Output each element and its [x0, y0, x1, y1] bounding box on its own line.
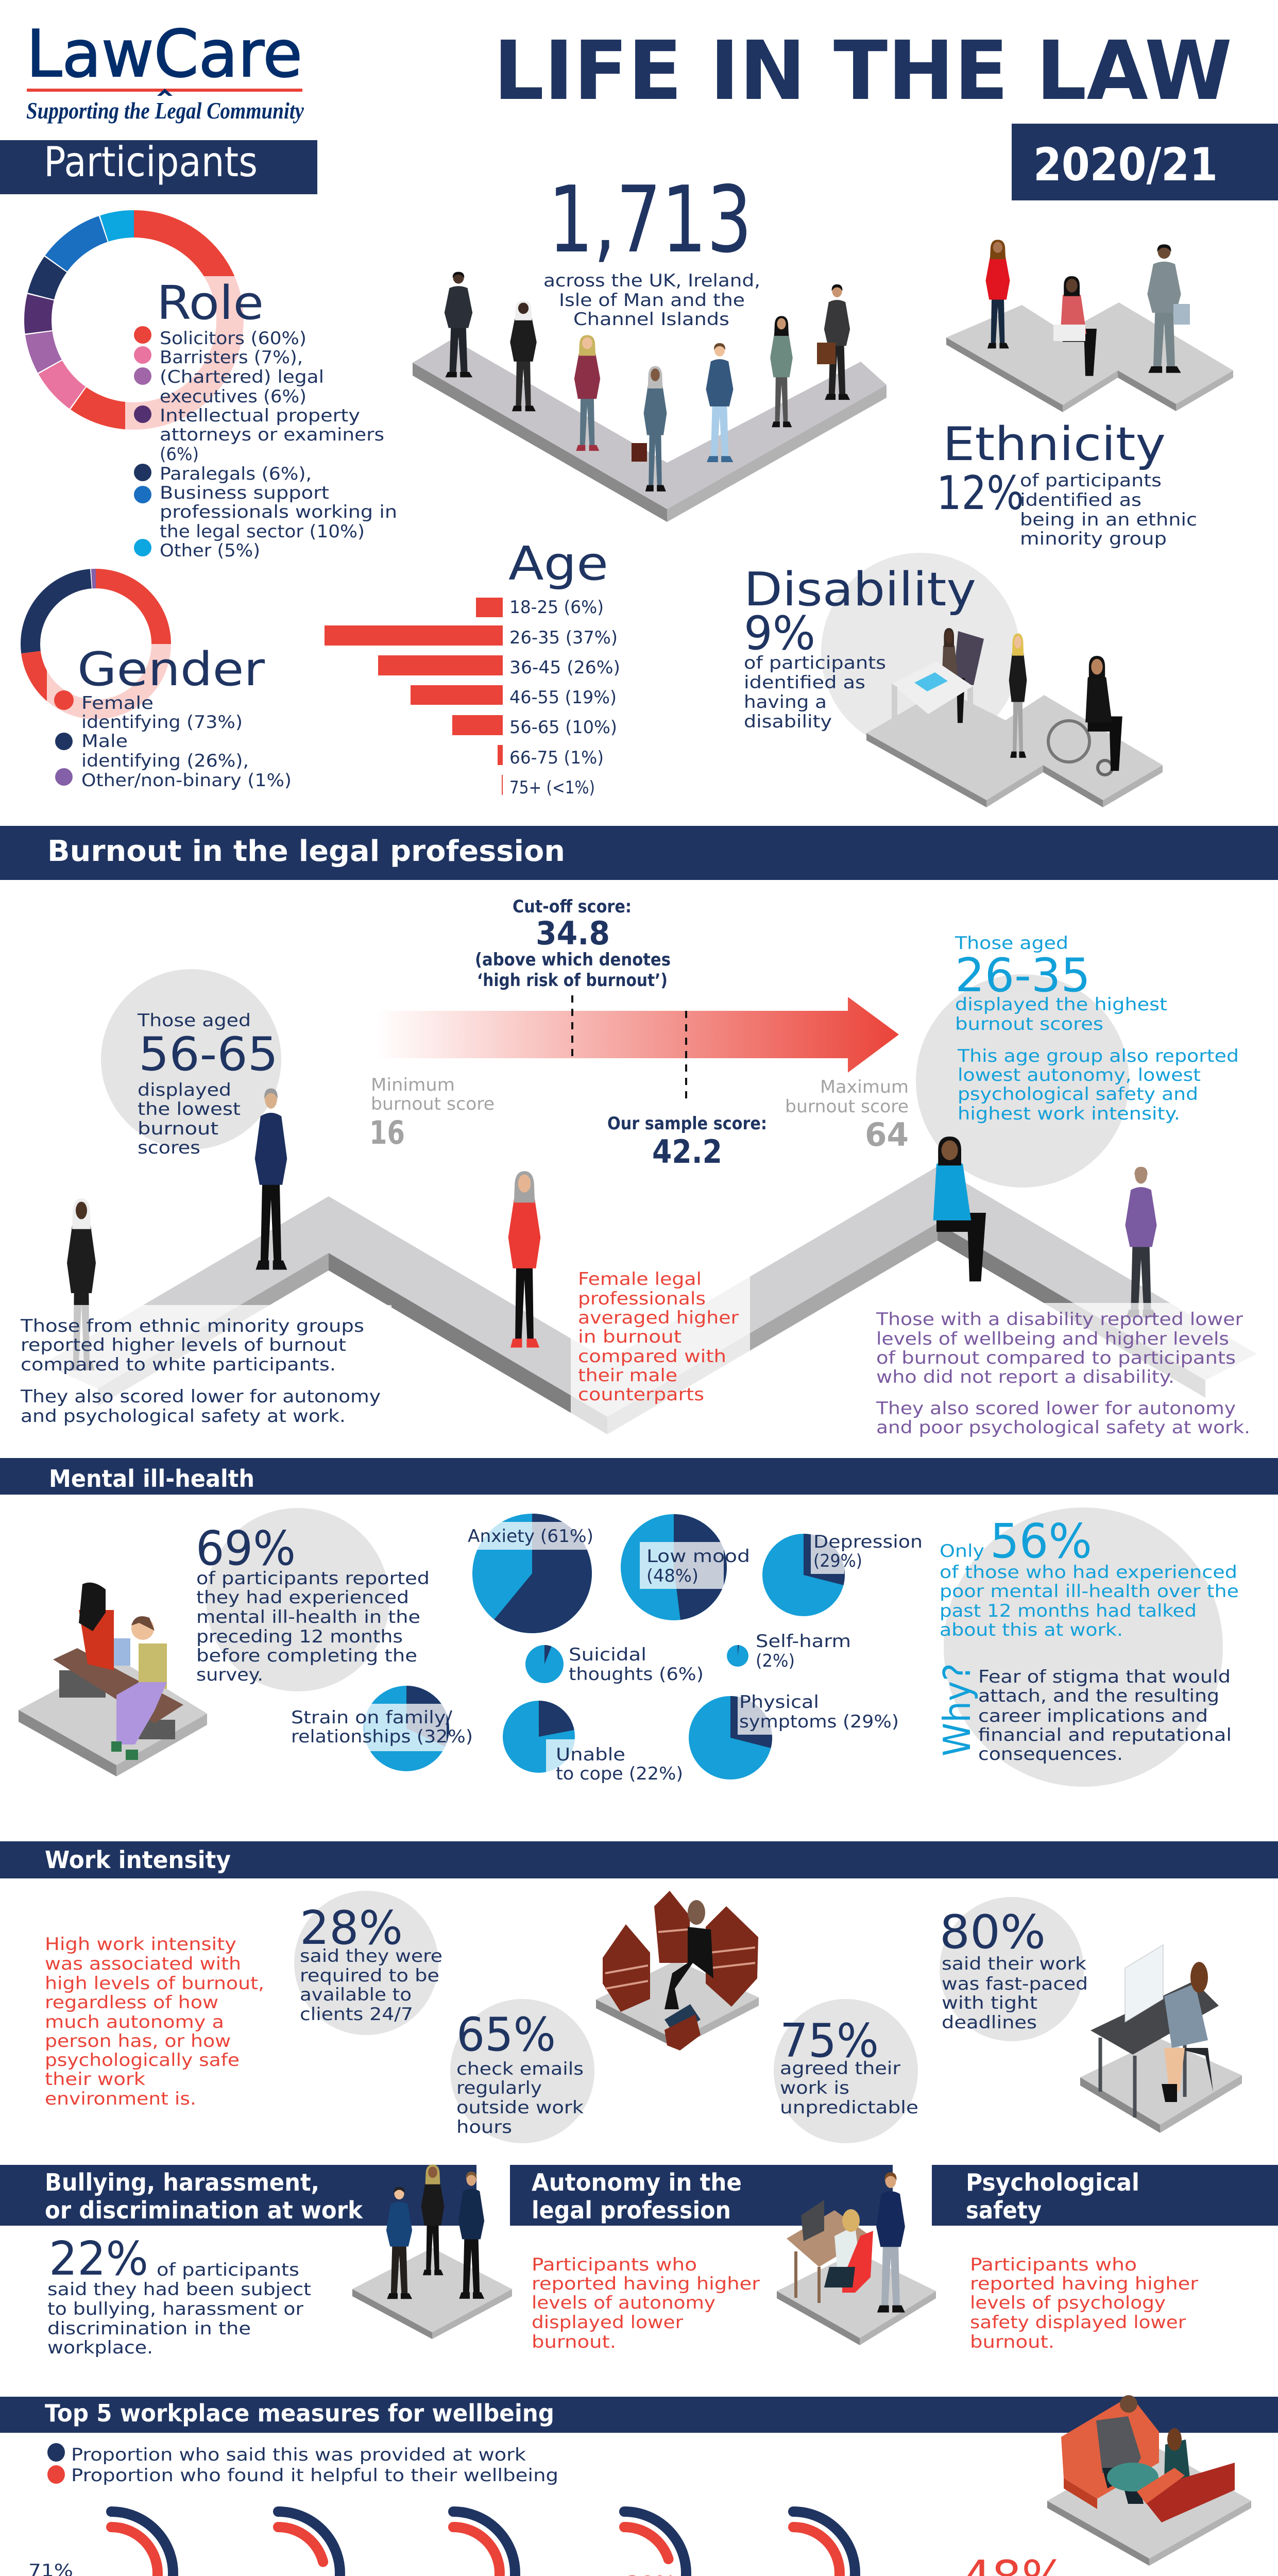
figures: disability — [892, 628, 1122, 775]
role legend: (Chartered) legal — [160, 367, 324, 387]
autonomy text: levels of autonomy — [532, 2293, 715, 2313]
stat: 65 percent: 65% — [456, 2008, 556, 2062]
disability text: having a — [744, 692, 827, 713]
female legal professionals text: professionals — [578, 1289, 706, 1309]
gender legend: Other/non-binary (1%) — [81, 770, 292, 791]
stat: 28 percent: 28% — [300, 1901, 403, 1955]
disability text: disability — [744, 711, 832, 732]
gender legend: Male — [81, 731, 128, 752]
locations text — [543, 270, 760, 330]
grey circle: lowest burnout — [101, 969, 281, 1149]
work intensity red text: much autonomy a — [45, 2012, 224, 2032]
lowest burnout text: displayed — [138, 1080, 231, 1100]
ethnicity text — [1020, 470, 1197, 549]
panel: ethnicity — [936, 240, 1233, 549]
lowest burnout text: Those aged — [137, 1010, 251, 1031]
zigzag platform — [42, 1166, 1257, 1434]
stat: 75 percent: work is — [780, 2078, 849, 2098]
age labels — [509, 597, 620, 798]
stat: 65 percent: hours — [456, 2117, 512, 2138]
ethnicity text: identified as — [1020, 490, 1141, 511]
female legal professionals text: their male — [578, 1365, 677, 1386]
role legend: Paralegals (6%), — [160, 464, 312, 484]
minimum score: 16 — [369, 1114, 405, 1151]
section: work intensity — [0, 1841, 1278, 2143]
stat: 80 percent: deadlines — [942, 2012, 1037, 2033]
pie: depression: Depression — [813, 1532, 923, 1552]
age labels: 36-45 (26%) — [509, 657, 620, 678]
role legend: professionals working in — [160, 502, 397, 522]
role legend — [134, 326, 397, 561]
stat: 65 percent: regularly — [456, 2078, 542, 2098]
gender legend: identifying (73%) — [81, 712, 243, 733]
age labels: 18-25 (6%) — [509, 597, 604, 618]
role legend: Other (5%) — [160, 540, 260, 561]
highest burnout text: This age group also reported — [957, 1046, 1239, 1066]
ethnicity percentage: 12% — [936, 466, 1024, 520]
arc chart: wellbeing and training — [383, 2512, 515, 2576]
role legend: executives (6%) — [160, 386, 306, 407]
psychological safety text: safety displayed lower — [970, 2312, 1186, 2333]
platform: ethnicity — [946, 302, 1233, 412]
platform: disability — [866, 689, 1163, 807]
section: workplace measures — [0, 2395, 1278, 2576]
female legal professionals text: Female legal — [578, 1269, 702, 1290]
heading: psychological safety — [932, 2165, 1278, 2226]
panel: disability — [744, 553, 1163, 807]
cut-off score — [475, 896, 671, 991]
pie: physical symptoms — [689, 1692, 899, 1780]
bullying stat: 22% — [49, 2232, 148, 2286]
heading: autonomy — [510, 2165, 893, 2226]
stat: 28 percent: clients 24/7 — [300, 2004, 413, 2025]
age labels: 75+ (<1%) — [509, 777, 595, 798]
highest burnout text: highest work intensity. — [958, 1104, 1180, 1124]
heading: top 5 measures: Top 5 workplace measures for wellbeing — [45, 2399, 554, 2427]
highest burnout text: displayed the highest — [955, 994, 1167, 1015]
bullying stat — [47, 2232, 311, 2358]
locations text: Channel Islands — [573, 309, 729, 330]
heading: top 5 measures — [0, 2397, 1278, 2433]
pie: low mood — [621, 1514, 750, 1620]
pie: depression — [762, 1532, 923, 1616]
56 percent stat: Only — [940, 1541, 984, 1562]
pie: strain on family: Strain on family/ — [291, 1707, 453, 1728]
heading: participants: Participants — [44, 138, 258, 186]
pie: self-harm: (2%) — [756, 1651, 795, 1671]
sample score: Our sample score: — [607, 1113, 767, 1134]
heading: work intensity — [0, 1841, 1278, 1878]
total number: 1,713 — [548, 166, 752, 273]
cut-off score: Cut-off score: — [513, 896, 632, 917]
stat: 65 percent — [450, 1999, 594, 2143]
panel: bullying — [0, 2164, 512, 2358]
pie: unable to cope — [503, 1701, 683, 1784]
heading: bullying — [0, 2165, 476, 2226]
female legal professionals text — [578, 1269, 739, 1405]
56 percent stat: about this at work. — [940, 1620, 1123, 1640]
pie: suicidal thoughts: Suicidal — [569, 1645, 646, 1665]
work intensity red text: environment is. — [45, 2089, 196, 2109]
illustration: three colleagues — [352, 2164, 512, 2339]
age labels: 66-75 (1%) — [509, 748, 604, 768]
age labels: 46-55 (19%) — [509, 687, 617, 708]
ethnicity text: of participants — [1020, 470, 1162, 491]
pie: physical symptoms: Physical — [739, 1692, 819, 1713]
female legal professionals text: counterparts — [578, 1384, 704, 1405]
69 percent stat: of participants reported — [196, 1568, 430, 1589]
female legal professionals text: in burnout — [578, 1327, 681, 1347]
ethnicity text: minority group — [1020, 529, 1167, 549]
why text: financial and reputational — [978, 1725, 1232, 1745]
69 percent stat: mental ill-health in the — [196, 1607, 420, 1628]
role heading: Role — [157, 276, 264, 330]
stat: 80 percent: with tight — [942, 1993, 1037, 2013]
highest burnout text: 26-35 — [955, 948, 1090, 1003]
why text: career implications and — [978, 1706, 1208, 1726]
disability percentage: 9% — [744, 606, 815, 660]
heading: burnout — [0, 826, 1278, 880]
highest burnout text: burnout scores — [955, 1014, 1103, 1035]
role legend: Intellectual property — [160, 405, 360, 426]
disability burnout text: who did not report a disability. — [876, 1367, 1174, 1387]
locations text: across the UK, Ireland, — [543, 270, 760, 291]
highest burnout text — [955, 933, 1239, 1124]
work intensity red text: their work — [45, 2069, 145, 2090]
stat: 65 percent: outside work — [456, 2097, 584, 2118]
stat: 80 percent — [940, 1897, 1088, 2041]
heading: burnout: Burnout in the legal profession — [47, 835, 565, 868]
minimum score: burnout score — [371, 1094, 495, 1114]
role legend: Solicitors (60%) — [160, 328, 306, 349]
stat: 75 percent: 75% — [780, 2014, 879, 2068]
autonomy text: displayed lower — [532, 2312, 683, 2333]
arc chart: private health insurance — [731, 2512, 855, 2576]
logo: LawCare: Supporting the Legal Community — [26, 98, 304, 124]
69 percent stat — [196, 1521, 430, 1685]
illustration: two people on sofas — [1047, 2395, 1251, 2566]
56 percent stat — [940, 1514, 1239, 1640]
work intensity red text: high levels of burnout, — [45, 1973, 264, 1994]
autonomy text: reported having higher — [532, 2274, 760, 2294]
why text — [978, 1667, 1232, 1765]
illustration: woman at desk — [1080, 1945, 1242, 2133]
bullying stat: workplace. — [47, 2337, 153, 2358]
gender legend — [54, 690, 292, 791]
highest burnout text: Those aged — [955, 933, 1068, 954]
locations text: Isle of Man and the — [559, 290, 745, 311]
gender legend: Female — [81, 693, 154, 714]
psychological safety text: Participants who — [970, 2255, 1137, 2275]
heading: autonomy: Autonomy in the — [532, 2168, 742, 2196]
bullying stat: to bullying, harassment or — [47, 2299, 303, 2319]
arc chart: regular catch-ups — [28, 2512, 173, 2576]
lowest burnout text: burnout — [138, 1118, 218, 1139]
stat: 75 percent — [774, 1999, 918, 2143]
maximum score — [785, 1077, 909, 1154]
panel: total participants — [413, 166, 887, 522]
disability text: of participants — [744, 653, 886, 673]
69 percent stat: preceding 12 months — [196, 1626, 403, 1647]
section: mental ill-health — [0, 1458, 1278, 1787]
role legend: (6%) — [160, 444, 199, 465]
69 percent stat: 69% — [196, 1521, 296, 1576]
pie: depression: (29%) — [813, 1551, 862, 1571]
ethnic minority text: They also scored lower for autonomy — [20, 1386, 381, 1407]
gender legend: identifying (26%), — [81, 751, 249, 771]
pie: unable to cope: Unable — [556, 1744, 625, 1765]
69 percent stat: survey. — [196, 1665, 263, 1685]
56 percent stat: poor mental ill-health over the — [940, 1581, 1239, 1602]
56 percent stat: of those who had experienced — [940, 1562, 1237, 1583]
highest burnout text: lowest autonomy, lowest — [958, 1065, 1201, 1086]
ethnicity heading: Ethnicity — [943, 417, 1166, 471]
lowest burnout text: scores — [138, 1138, 200, 1158]
stat: 80 percent: said their work — [942, 1954, 1086, 1974]
why text: Fear of stigma that would — [978, 1667, 1231, 1687]
grey circle: highest burnout — [916, 974, 1129, 1188]
ethnic minority text: and psychological safety at work. — [21, 1406, 346, 1427]
arc chart: mental health policies — [210, 2512, 340, 2576]
pie: suicidal thoughts: thoughts (6%) — [569, 1664, 704, 1685]
pie: anxiety: Anxiety (61%) — [468, 1526, 593, 1547]
minimum score — [369, 1075, 495, 1151]
cut-off score: ‘high risk of burnout’) — [477, 970, 668, 991]
heading: participants — [0, 138, 317, 194]
work intensity red text: was associated with — [45, 1954, 241, 1974]
disability text: identified as — [744, 672, 865, 693]
disability heading: Disability — [744, 563, 976, 617]
pie: self-harm: Self-harm — [756, 1631, 851, 1652]
lowest burnout text — [137, 1010, 278, 1158]
gender donut chart — [30, 579, 161, 709]
why text: attach, and the resulting — [978, 1686, 1219, 1706]
gender heading: Gender — [77, 642, 265, 697]
role donut chart — [38, 224, 230, 416]
chart legend — [47, 2443, 558, 2486]
pie: unable to cope: to cope (22%) — [556, 1764, 683, 1784]
disability burnout text: levels of wellbeing and higher levels — [876, 1329, 1229, 1349]
ethnic minority text: compared to white participants. — [21, 1354, 336, 1375]
heading: psychological safety: Psychological — [966, 2168, 1139, 2196]
stat: 65 percent: check emails — [456, 2059, 584, 2079]
bullying stat: discrimination in the — [47, 2318, 251, 2339]
autonomy text: Participants who — [532, 2255, 697, 2275]
figures: burnout — [67, 1089, 1157, 1370]
stat: 80 percent: was fast-paced — [942, 1974, 1088, 1994]
disability burnout text: of burnout compared to participants — [876, 1348, 1236, 1368]
chart legend: Proportion who found it helpful to their wellbeing — [71, 2465, 558, 2486]
arc chart: signposting — [563, 2512, 686, 2576]
psychological safety text: levels of psychology — [970, 2293, 1166, 2313]
disability burnout text — [876, 1309, 1250, 1438]
panel: psychological safety — [932, 2165, 1278, 2352]
figures: legal professionals — [445, 272, 850, 492]
female legal professionals text: compared with — [578, 1346, 726, 1367]
platform: participants — [413, 339, 887, 522]
disability text — [744, 653, 886, 732]
autonomy text: burnout. — [532, 2332, 616, 2352]
stat: 28 percent: available to — [300, 1985, 412, 2005]
heading: bullying: Bullying, harassment, — [45, 2168, 319, 2196]
why heading: Why? — [935, 1663, 979, 1756]
age labels: 56-65 (10%) — [509, 717, 617, 738]
work intensity red text: psychologically safe — [45, 2050, 240, 2071]
maximum score: 64 — [865, 1116, 909, 1154]
bullying stat: said they had been subject — [47, 2279, 311, 2300]
56 percent stat: 56% — [990, 1514, 1092, 1569]
panel: age — [325, 537, 620, 798]
cut-off score: 34.8 — [536, 914, 610, 952]
69 percent stat: they had experienced — [196, 1587, 409, 1608]
age bar chart — [325, 598, 503, 795]
female legal professionals text: averaged higher — [578, 1308, 739, 1328]
logo: LawCare: LawCare — [26, 16, 302, 92]
69 percent stat: before completing the — [196, 1646, 417, 1666]
pie: suicidal thoughts — [525, 1645, 704, 1685]
ethnic minority text — [20, 1316, 381, 1427]
highest burnout text: psychological safety and — [958, 1084, 1198, 1105]
role legend: Barristers (7%), — [160, 347, 303, 368]
title: LIFE IN THE LAW — [493, 24, 1232, 118]
stat: 80 percent: 80% — [940, 1905, 1046, 1959]
pie: low mood: Low mood — [646, 1546, 750, 1567]
section: burnout — [0, 826, 1278, 1449]
pie: low mood: (48%) — [646, 1566, 698, 1586]
work intensity red text: High work intensity — [45, 1934, 236, 1955]
role legend: the legal sector (10%) — [160, 521, 365, 542]
ethnic minority text: reported higher levels of burnout — [21, 1335, 346, 1355]
age heading: Age — [508, 537, 608, 591]
psychological safety text: reported having higher — [970, 2274, 1198, 2294]
maximum score: burnout score — [785, 1096, 909, 1117]
year badge — [1012, 124, 1278, 200]
bullying stat: of participants — [157, 2260, 299, 2280]
stat: 28 percent: said they were — [300, 1946, 442, 1967]
figures: ethnicity — [985, 240, 1190, 376]
ethnicity text: being in an ethnic — [1020, 510, 1197, 530]
heading: autonomy: legal profession — [532, 2196, 731, 2224]
autonomy text — [532, 2255, 760, 2352]
minimum score: Minimum — [371, 1075, 455, 1095]
disability burnout text: They also scored lower for autonomy — [876, 1398, 1236, 1419]
stat: 28 percent — [294, 1891, 442, 2035]
burnout arrow — [375, 995, 899, 1105]
pie: self-harm — [727, 1631, 851, 1671]
pie: anxiety — [468, 1514, 593, 1633]
chart legend: Proportion who said this was provided at work — [71, 2445, 526, 2465]
stat: 28 percent: required to be — [300, 1965, 439, 1986]
why text: consequences. — [978, 1744, 1123, 1765]
year badge: 2020/21 — [1033, 138, 1218, 191]
maximum score: Maximum — [820, 1077, 909, 1097]
role legend: attorneys or examiners — [160, 425, 384, 445]
disability burnout text: Those with a disability reported lower — [876, 1309, 1243, 1330]
lowest burnout text: the lowest — [138, 1099, 241, 1120]
cut-off score: (above which denotes — [475, 950, 671, 970]
ethnic minority text: Those from ethnic minority groups — [20, 1316, 364, 1336]
heading: mental ill-health: Mental ill-health — [49, 1465, 254, 1493]
illustration: office desk — [777, 2172, 936, 2345]
panel: gender — [30, 579, 292, 793]
illustration: man with stacks of books — [596, 1891, 759, 2050]
role legend: Business support — [160, 483, 329, 503]
sample score: 42.2 — [652, 1133, 722, 1171]
panel: autonomy — [510, 2165, 936, 2352]
psychological safety text: burnout. — [970, 2332, 1054, 2352]
lowest burnout text: 56-65 — [139, 1027, 278, 1081]
disability burnout text: and poor psychological safety at work. — [876, 1417, 1250, 1438]
heading: mental ill-health — [0, 1458, 1278, 1495]
pie: physical symptoms: symptoms (29%) — [739, 1711, 899, 1732]
panel: role — [38, 224, 414, 565]
illustration: people on bench — [19, 1583, 207, 1776]
work intensity red text: person has, or how — [45, 2031, 231, 2052]
heading: bullying: or discrimination at work — [45, 2196, 363, 2224]
56 percent stat: past 12 months had talked — [940, 1601, 1197, 1621]
work intensity red text — [45, 1934, 264, 2109]
age labels: 26-35 (37%) — [509, 628, 618, 648]
work intensity red text: regardless of how — [45, 1992, 218, 2013]
psychological safety text — [970, 2255, 1198, 2352]
pie: strain on family: relationships (32%) — [291, 1726, 473, 1747]
stat: 75 percent: unpredictable — [780, 2097, 918, 2118]
stat: 75 percent: agreed their — [780, 2058, 900, 2079]
heading: work intensity: Work intensity — [45, 1846, 231, 1874]
pie: strain on family — [291, 1686, 473, 1771]
heading: psychological safety: safety — [966, 2196, 1042, 2224]
sample score — [607, 1113, 767, 1171]
